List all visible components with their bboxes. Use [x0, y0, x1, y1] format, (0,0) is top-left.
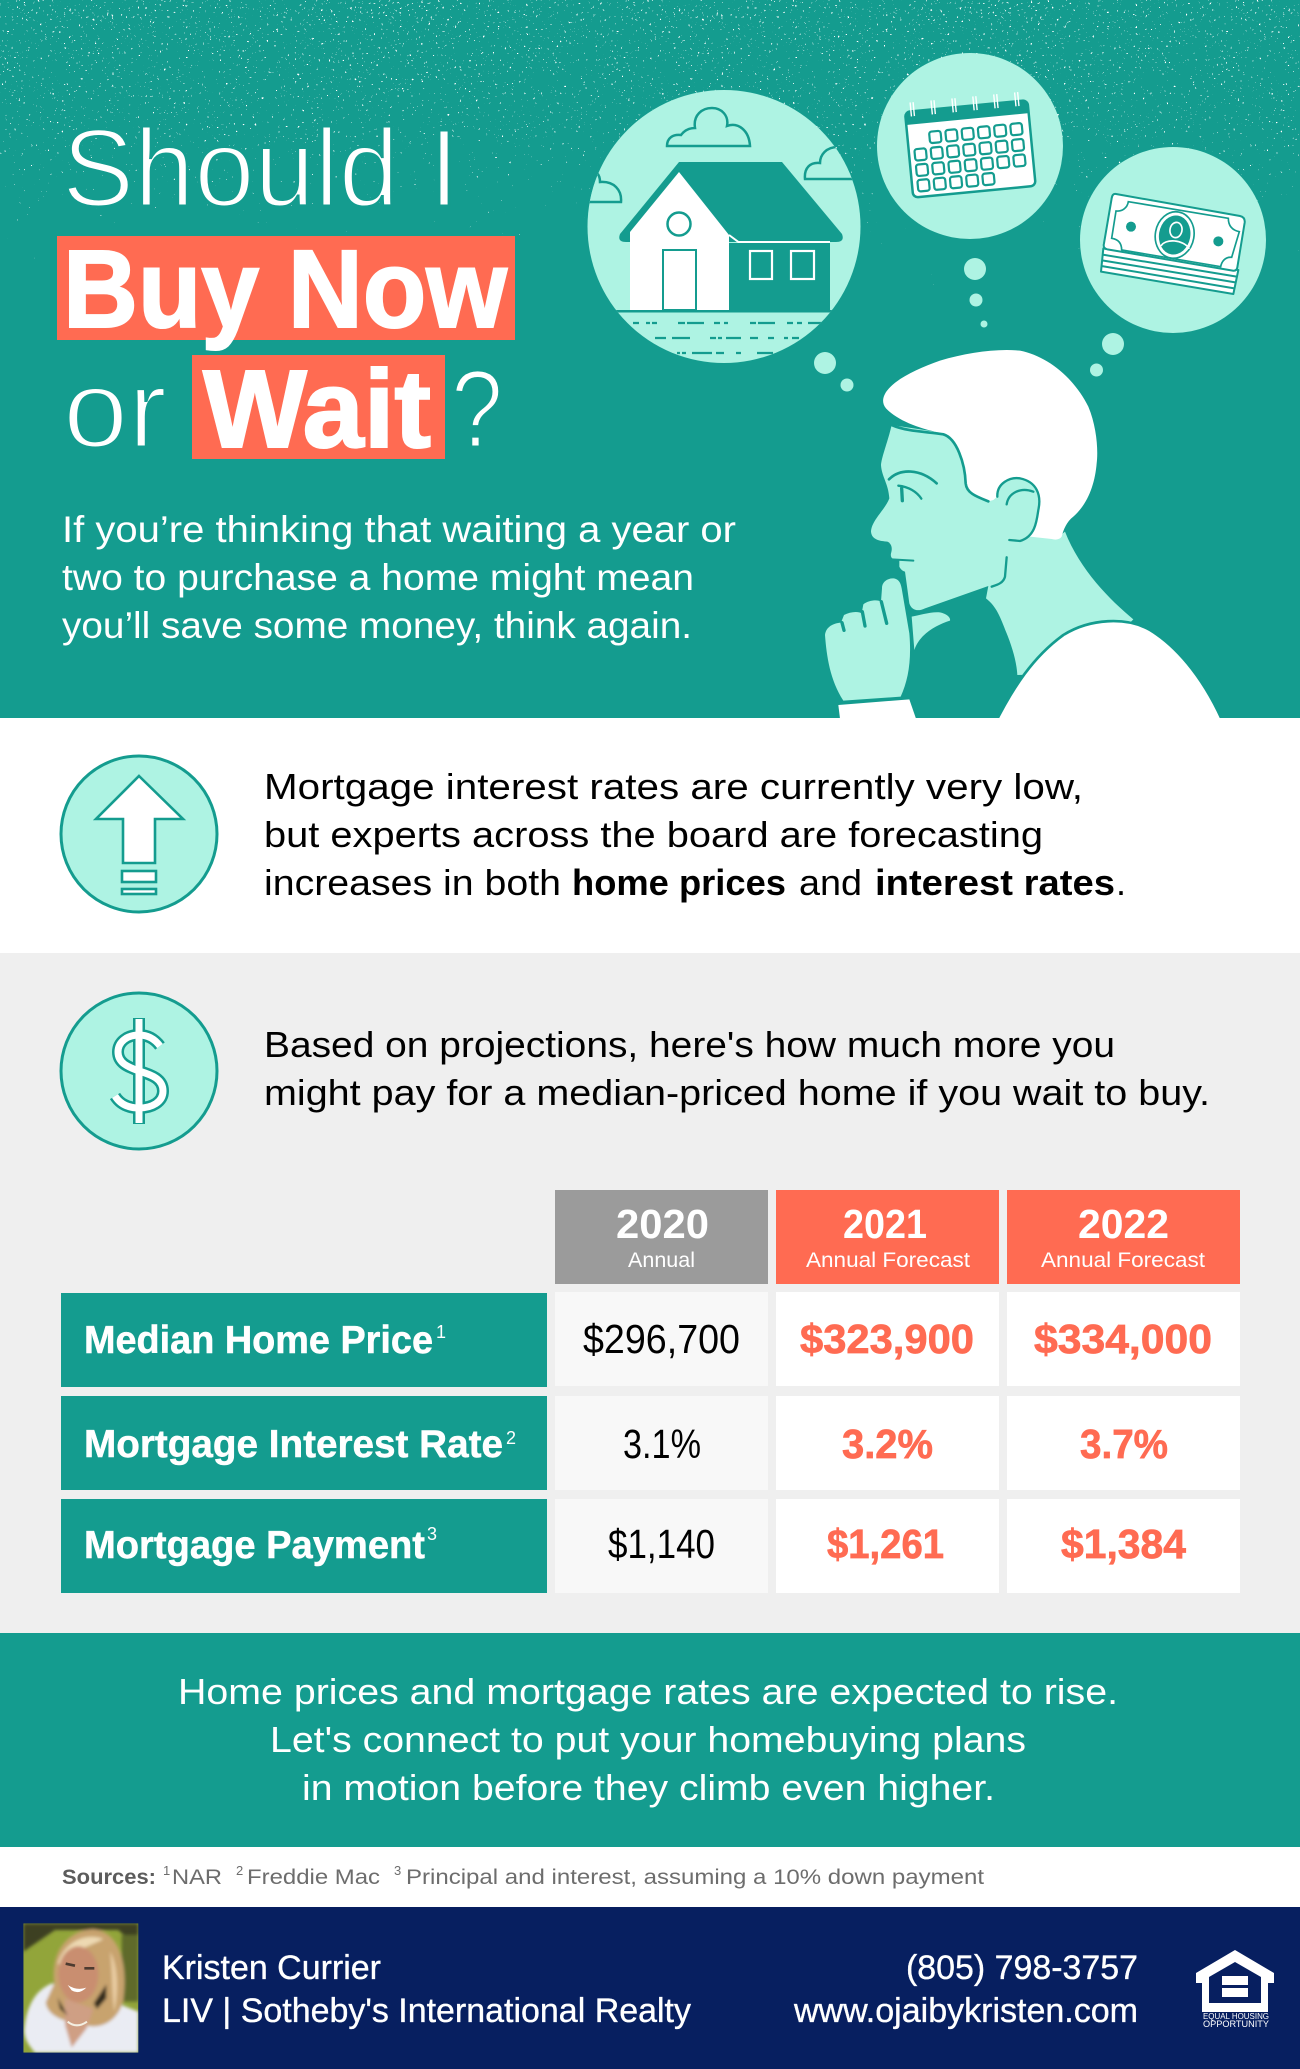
- text: rates forecast: but experts across the board are forecasting: [264, 814, 1043, 855]
- hero paragraph: two to purchase a home might mean: [62, 557, 694, 598]
- hero paragraph: [62, 509, 736, 646]
- text: contact details: [793, 1949, 1138, 2030]
- text: contact details: (805) 798-3757: [906, 1949, 1138, 1987]
- finger lines: [842, 602, 887, 630]
- icon: calendar thought bubble: [877, 53, 1063, 239]
- text: projections: Based on projections, here's how much more you: [264, 1024, 1115, 1065]
- row: mortgage interest rate: 3.7%: [1080, 1421, 1168, 1467]
- panel: sources: 3: [394, 1863, 401, 1878]
- text: call to action: Home prices and mortgage rates are expected to rise.: [178, 1671, 1118, 1712]
- panel: sources: NAR: [172, 1866, 222, 1889]
- text: contact details: www.ojaibykristen.com: [793, 1992, 1138, 2030]
- row: mortgage payment: Mortgage Payment: [84, 1524, 425, 1567]
- row: median home price: $323,900: [800, 1316, 974, 1362]
- hand: [825, 578, 910, 701]
- header: 2021: [776, 1190, 999, 1284]
- text: agent name and brokerage: Kristen Currier: [162, 1949, 381, 1987]
- icon: house bubble dots: [814, 352, 854, 392]
- panel: sources: Principal and interest, assuming a 10% down payment: [406, 1866, 984, 1889]
- row: median home price: [61, 1292, 1240, 1387]
- highlight box: Buy Now: [57, 236, 515, 340]
- row: mortgage interest rate: 3.2%: [842, 1421, 933, 1467]
- text: rates forecast: interest rates: [875, 862, 1115, 903]
- text: rates forecast: home prices: [572, 862, 786, 903]
- panel: rates forecast: [0, 718, 1300, 953]
- hero paragraph: If you’re thinking that waiting a year or: [62, 509, 736, 550]
- text: agent name and brokerage: LIV | Sotheby's International Realty: [162, 1992, 691, 2030]
- panel: sources: [0, 1847, 1300, 1907]
- row: mortgage payment: $1,384: [1061, 1521, 1186, 1567]
- panel: call to action: [0, 1633, 1300, 1847]
- header: 2021: Annual Forecast: [806, 1249, 970, 1272]
- cuff: [838, 699, 916, 719]
- title mark: question: ?: [451, 348, 503, 471]
- icon: equal housing opportunity: [1196, 1950, 1274, 2029]
- title line: Buy Now: Buy Now: [63, 228, 507, 351]
- header: 2021: 2021: [843, 1201, 927, 1247]
- table: [61, 1190, 1240, 1593]
- title: [57, 107, 515, 471]
- text: rates forecast: .: [1116, 862, 1126, 903]
- panel: sources: Freddie Mac: [247, 1866, 380, 1889]
- row: median home price: $334,000: [1034, 1316, 1212, 1362]
- text: projections: might pay for a median-priced home if you wait to buy.: [264, 1072, 1210, 1113]
- header: 2022: [1007, 1190, 1240, 1284]
- text: call to action: Let's connect to put your homebuying plans: [270, 1719, 1026, 1760]
- panel: footer: [0, 1907, 1300, 2069]
- text: call to action: [178, 1671, 1118, 1808]
- row: mortgage payment: $1,261: [827, 1521, 944, 1567]
- row: mortgage payment: 3: [427, 1524, 437, 1544]
- icon: house thought bubble: [580, 90, 870, 363]
- ear: [993, 478, 1039, 541]
- title line: Should I: Should I: [62, 107, 459, 230]
- panel: hero: [0, 0, 1300, 727]
- neck and face: [871, 425, 1133, 675]
- icon: calendar bubble dots: [964, 258, 988, 328]
- thumb: [912, 612, 950, 650]
- panel: sources: 2: [236, 1863, 243, 1878]
- highlight box: Wait: [192, 355, 445, 459]
- row: mortgage payment: [61, 1499, 1240, 1593]
- row: mortgage interest rate: 3.1%: [623, 1421, 701, 1467]
- row: median home price: 1: [436, 1322, 446, 1342]
- hero paragraph: you’ll save some money, think again.: [62, 605, 692, 646]
- facial lines: [889, 425, 1039, 587]
- text: rates forecast: increases in both: [264, 862, 561, 903]
- illustration: thinking man: [825, 350, 1225, 727]
- icon: money bubble dots: [1090, 333, 1124, 376]
- icon: money thought bubble: [1080, 147, 1266, 333]
- icon: equal housing opportunity: OPPORTUNITY: [1203, 2019, 1269, 2029]
- header: 2022: Annual Forecast: [1041, 1249, 1205, 1272]
- icon: equal housing opportunity: EQUAL HOUSING: [1203, 2012, 1269, 2021]
- icon: up arrow: [61, 756, 217, 912]
- panel: sources: Sources:: [62, 1866, 156, 1889]
- row: median home price: $296,700: [583, 1316, 740, 1362]
- row: mortgage interest rate: [61, 1396, 1240, 1490]
- header: 2020: Annual: [628, 1249, 695, 1272]
- title word: Wait: Wait: [203, 348, 431, 471]
- photo: agent portrait: [23, 1923, 138, 2053]
- text: rates forecast: [264, 766, 1126, 903]
- row: mortgage interest rate: Mortgage Interest Rate: [84, 1423, 503, 1466]
- row: mortgage interest rate: 2: [506, 1428, 516, 1448]
- text: rates forecast: Mortgage interest rates are currently very low,: [264, 766, 1083, 807]
- text: projections: [264, 1024, 1210, 1113]
- header: 2022: 2022: [1078, 1201, 1169, 1247]
- panel: sources: 1: [163, 1863, 170, 1878]
- icon: dollar sign: [61, 993, 217, 1149]
- text: call to action: in motion before they climb even higher.: [302, 1767, 995, 1808]
- header: 2020: [555, 1190, 768, 1284]
- row: median home price: Median Home Price: [84, 1319, 433, 1362]
- title word: or: or: [63, 348, 167, 471]
- hair: [883, 350, 1097, 540]
- row: mortgage payment: $1,140: [608, 1521, 715, 1567]
- panel: projections: [0, 953, 1300, 1633]
- text: agent name and brokerage: [162, 1949, 691, 2030]
- text: rates forecast: and: [799, 862, 862, 903]
- shoulder: [993, 621, 1225, 727]
- header: 2020: 2020: [616, 1201, 709, 1247]
